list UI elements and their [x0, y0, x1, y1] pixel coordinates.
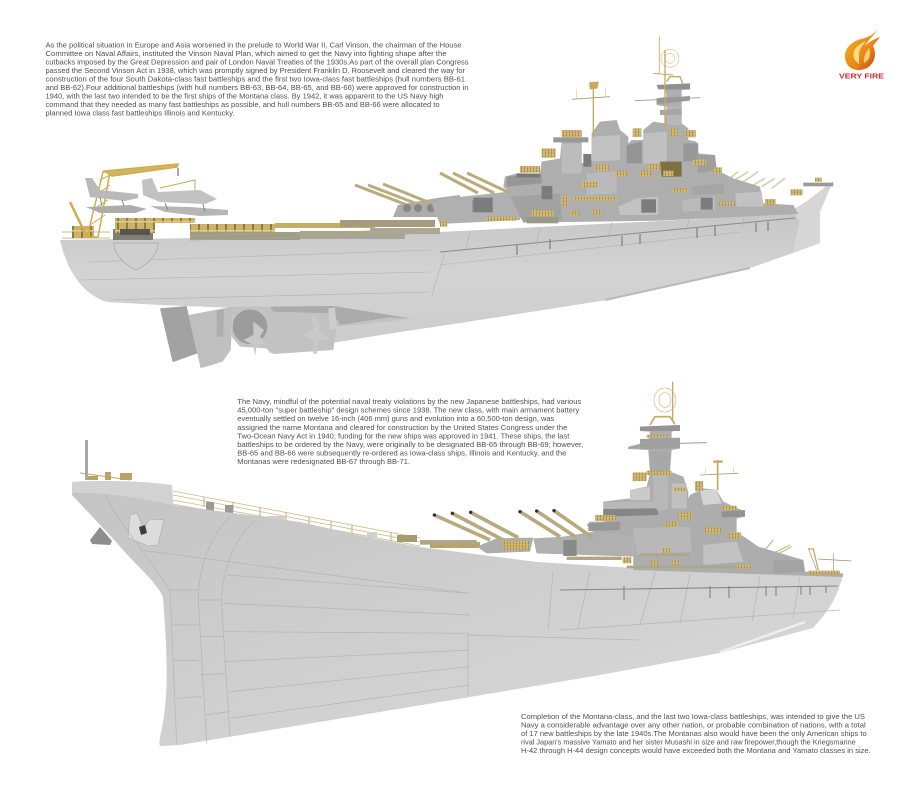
superstructure: [420, 382, 852, 577]
davits: [517, 222, 768, 255]
bilge keel: [720, 622, 805, 652]
text block: Vinson plan history: command that they needed as many fast battleships as possible, and hull numbers BB-65 and BB-66 were allocated to: [46, 100, 440, 109]
text block: Montana class design: [237, 397, 583, 466]
main gun turrets: [433, 509, 633, 557]
armor belt line: [560, 586, 838, 590]
text block: Vinson plan history: [46, 40, 469, 118]
dark accents: [473, 154, 833, 223]
hawse shadow: [139, 525, 147, 535]
text block: Vinson plan history: and BB-62).Four additional battleships (with hull numbers BB-63, BB-64, BB-65, and BB-66) were approved for construction in: [46, 83, 468, 92]
masts and radar: [628, 382, 852, 572]
superstructure: [440, 37, 833, 227]
text block: Montana class design: battleships to be ordered by the Navy, were originally to be designated BB-65 through BB-69; however,: [237, 440, 583, 449]
text block: Montana class design: assigned the name Montana and cleared for construction by the United States Congress under the: [237, 423, 567, 432]
ship 1: battleship viewed from stern: [60, 37, 833, 368]
flared bow top: [72, 481, 172, 505]
text block: Montana class design: Montanas were redesignated BB-67 through BB-71.: [237, 457, 410, 466]
text block: Montana class design: The Navy, mindful of the potential naval treaty violations by the new Japanese battleships, had various: [237, 397, 582, 406]
text block: Montana class design: 45,000-ton "super battleship" design schemes since 1938. The new class, with main armament battery: [237, 406, 580, 414]
text block: Vinson plan history: passed the Second Vinson Act in 1938, which was promptly signed by President Franklin D. Roosevelt and cleared the way for: [46, 66, 466, 75]
gold details: [440, 128, 822, 227]
text block: Montana class legacy: [521, 712, 871, 755]
superstructure silhouette: [587, 425, 843, 577]
bow section: [793, 181, 833, 253]
blocks: [603, 501, 658, 517]
gold details: [595, 435, 840, 574]
bow railing: [173, 491, 420, 550]
text block: Vinson plan history: 1940, with the last two intended to be the first ships of the Montana class. By 1942, it was apparent to the US Navy high: [46, 92, 444, 100]
hull panel lines: [80, 212, 795, 300]
underwater gear: rudders and propellers: [160, 306, 412, 368]
bow bulb shadow: [90, 527, 112, 545]
ship 2: battleship viewed from bow: [72, 382, 852, 746]
forward turret with three barrels: [432, 173, 525, 224]
deck rail bands: [420, 540, 737, 568]
text block: Vinson plan history: construction of the four South Dakota-class fast battleships and the first two Iowa-class fast battleships (hull numbers BB-61: [46, 74, 465, 84]
platforms: [657, 83, 690, 89]
platforms: [640, 425, 680, 431]
text block: Montana class legacy: H-42 through H-44 design concepts would have exceeded both the Montana and Yamato classes in size.: [521, 746, 871, 755]
bow jackstaff and forward guns: [80, 440, 132, 480]
superstructure silhouette: [503, 83, 798, 223]
text block: Montana class design: Two-Ocean Navy Act in 1940; funding for the new ships was approved in 1941. These ships, the last: [237, 432, 569, 440]
text block: Vinson plan history: planned Iowa class fast battleships Illinois and Kentucky.: [46, 109, 234, 118]
hull: [60, 210, 800, 353]
text block: Vinson plan history: As the political situation in Europe and Asia worsened in the prelude to World War II, Carl Vinson, the chairman of the House: [46, 40, 462, 50]
crane: [70, 164, 178, 237]
forward secondary guns and aircraft rig: [763, 540, 792, 560]
davits: [624, 586, 826, 600]
logo wordmark: VERY FIRE: [839, 74, 884, 80]
masts and radar: [572, 37, 700, 137]
text block: Montana class design: BB-65 and BB-66 were subsequently re-ordered as Iowa-class ships, Illinois and Kentucky, and the: [237, 448, 566, 458]
aft turret with three barrels: [355, 184, 460, 217]
floatplane 1: [85, 178, 147, 213]
text block: Montana class legacy: of 17 new battleships by the late 1940s.The Montanas also would have been the only American ships to: [521, 729, 867, 738]
text block: Vinson plan history: Committee on Naval Affairs, instituted the Vinson Naval Plan, which aimed to get the Navy into fighting shape after the: [46, 49, 446, 58]
lower deckhouse blocks: [618, 197, 658, 215]
second turret and barrels: [518, 509, 633, 557]
hull: [72, 481, 843, 746]
hull panel lines: [105, 495, 470, 743]
logo: Very Fire: [839, 25, 884, 80]
forward secondary guns: [730, 172, 785, 188]
main gun turrets: [355, 173, 525, 224]
text block: Vinson plan history: cutbacks imposed by the Great Depression and pair of London Naval Treaties of the 1930s.As part of the overall plan Congress: [46, 58, 469, 66]
text block: Montana class legacy: Completion of the Montana-class, and the last two Iowa-class battleships, was intended to give the US: [521, 712, 865, 721]
text block: Montana class design: eventually settled on twelve 16-inch (406 mm) guns and evolution into a 60,500-ton design, was: [237, 414, 555, 423]
forward turret and barrels: [433, 511, 533, 553]
boat recess on stern: [114, 243, 158, 270]
icon: flame: [845, 25, 880, 70]
anchor: [128, 513, 164, 546]
anchor-deck fittings: [206, 502, 480, 548]
floatplane 2: [142, 178, 228, 216]
aft deck equipment: [62, 218, 440, 240]
text block: Montana class legacy: Navy a considerable advantage over any other nation, or probable combination of nations, with a total: [521, 720, 866, 730]
text block: Montana class legacy: rival Japan's massive Yamato and her sister Musashi in size and raw firepower,though the Kriegsmarine: [521, 738, 856, 746]
